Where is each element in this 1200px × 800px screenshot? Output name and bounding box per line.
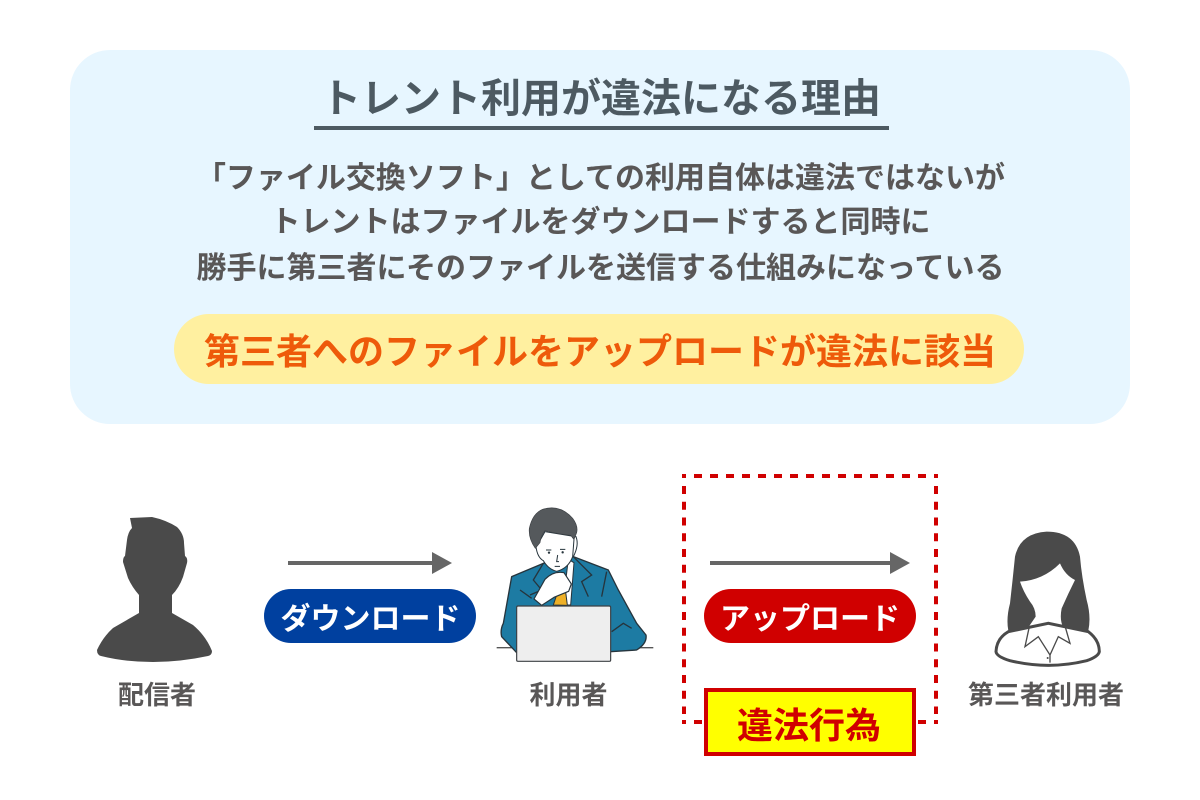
- label: distributor: 配信者: [118, 680, 196, 710]
- icon: third party silhouette: [996, 532, 1099, 665]
- label: user: 利用者: [529, 680, 608, 710]
- title: トレント利用が違法になる理由: [321, 77, 881, 121]
- illegal zone dashed frame: [682, 474, 938, 724]
- icon: thinking businessman at laptop: [497, 508, 653, 661]
- arrow: upload: [710, 552, 910, 574]
- badge: download: ダウンロード: [280, 602, 460, 636]
- callout: illegal act: 違法行為: [737, 705, 881, 746]
- badge: upload: [704, 589, 916, 643]
- badge: download: [264, 589, 476, 643]
- callout: highlighted conclusion: 第三者へのファイルをアップロードが違法に該当: [204, 331, 996, 372]
- text block: explanation: 勝手に第三者にそのファイルを送信する仕組みになっている: [197, 252, 1004, 285]
- callout: highlighted conclusion: [174, 314, 1024, 384]
- icon: distributor silhouette: [97, 517, 212, 662]
- panel: explanation: [70, 50, 1130, 424]
- text block: explanation: [196, 161, 1005, 285]
- callout: illegal act: [706, 690, 914, 754]
- text block: explanation: 「ファイル交換ソフト」としての利用自体は違法ではないが: [196, 161, 1005, 195]
- text block: explanation: トレントはファイルをダウンロードすると同時に: [270, 205, 930, 239]
- badge: upload: アップロード: [720, 603, 900, 636]
- label: third-party user: 第三者利用者: [968, 680, 1124, 710]
- arrow: download: [288, 552, 452, 574]
